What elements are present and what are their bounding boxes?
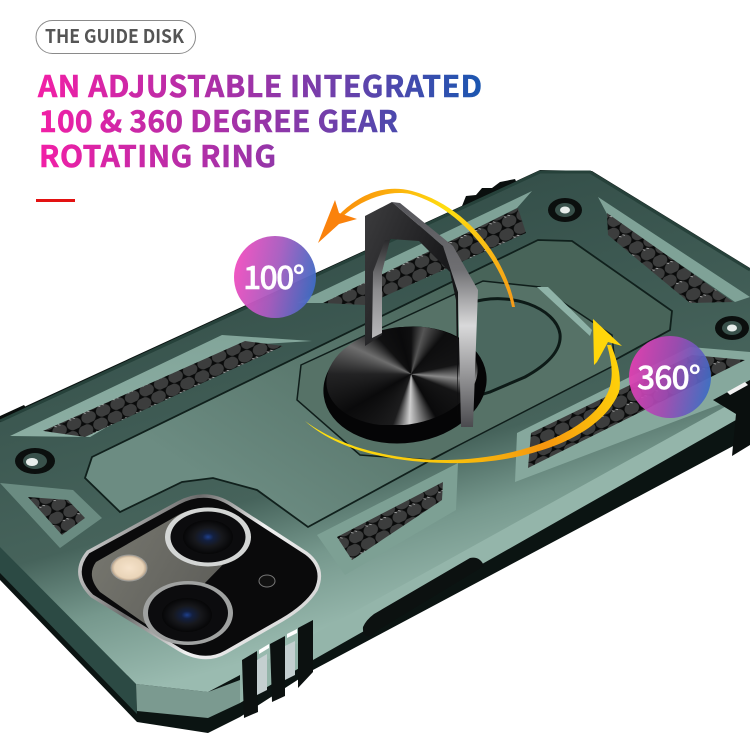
arrow head [593, 319, 622, 365]
screw: top [548, 198, 582, 222]
grip strip: right [528, 355, 745, 468]
camera black glass with silver rim [80, 496, 319, 658]
arc shaft [340, 189, 515, 307]
arrow: 100 degree rotation [318, 189, 515, 307]
side button recess [363, 558, 484, 636]
screw: right [715, 316, 749, 340]
phone case [0, 170, 750, 733]
arrow head [318, 200, 357, 243]
glass reflection [92, 509, 247, 632]
ring silver edge [392, 202, 478, 427]
top edge bevel [0, 172, 750, 421]
grip light band: right [515, 347, 750, 482]
upper lens [165, 508, 251, 566]
grip light band: lower left [0, 483, 102, 548]
microphone [259, 575, 275, 587]
case side band [0, 545, 137, 714]
screw: left [15, 448, 55, 474]
grip light band: top middle [297, 191, 532, 303]
right side wall [240, 390, 750, 703]
pill label: THE GUIDE DISK: THE GUIDE DISK [45, 22, 185, 49]
badge: 100 degrees: 100° [243, 253, 305, 299]
title heading: ROTATING RING [39, 132, 276, 176]
case top face [0, 173, 750, 692]
title heading: AN ADJUSTABLE INTEGRATED [37, 62, 482, 106]
arc shaft [305, 345, 620, 463]
side cut-out notches [242, 620, 313, 718]
flash [111, 555, 147, 581]
grip strip: top middle [323, 208, 526, 305]
camera module [80, 496, 319, 658]
badge: 360 degrees [629, 336, 711, 418]
title heading: 100 & 360 DEGREE GEAR [39, 97, 398, 141]
bottom corner side wall [136, 680, 240, 718]
arrow: 360 degree rotation [305, 319, 622, 463]
ring holder [316, 202, 560, 454]
lower lens [143, 581, 233, 645]
pill shaped base plate [470, 299, 560, 398]
mount highlight stripe [537, 287, 592, 336]
top bumper clips [0, 179, 519, 426]
case black base silhouette [0, 170, 750, 733]
badge: 360 degrees: 360° [637, 353, 701, 399]
grip light band: lower right [317, 463, 458, 575]
grip strip: lower left [28, 497, 85, 535]
metal disc with radial sheen [326, 327, 478, 425]
red accent line [36, 199, 75, 202]
title heading [37, 62, 482, 176]
ring left leg inner highlight [372, 240, 390, 338]
ring mount hexagon [297, 281, 615, 460]
right bumper [713, 380, 750, 456]
ring dark arch [365, 202, 458, 417]
grip light band: left [10, 335, 312, 437]
grip strip: left [43, 341, 283, 437]
grip light band: top right [598, 197, 750, 302]
badge: 100 degrees [234, 236, 316, 318]
grip strip: top right [607, 213, 733, 303]
recessed central panel [85, 240, 672, 527]
disc rim [316, 316, 494, 454]
grip strip: lower right [337, 482, 443, 560]
